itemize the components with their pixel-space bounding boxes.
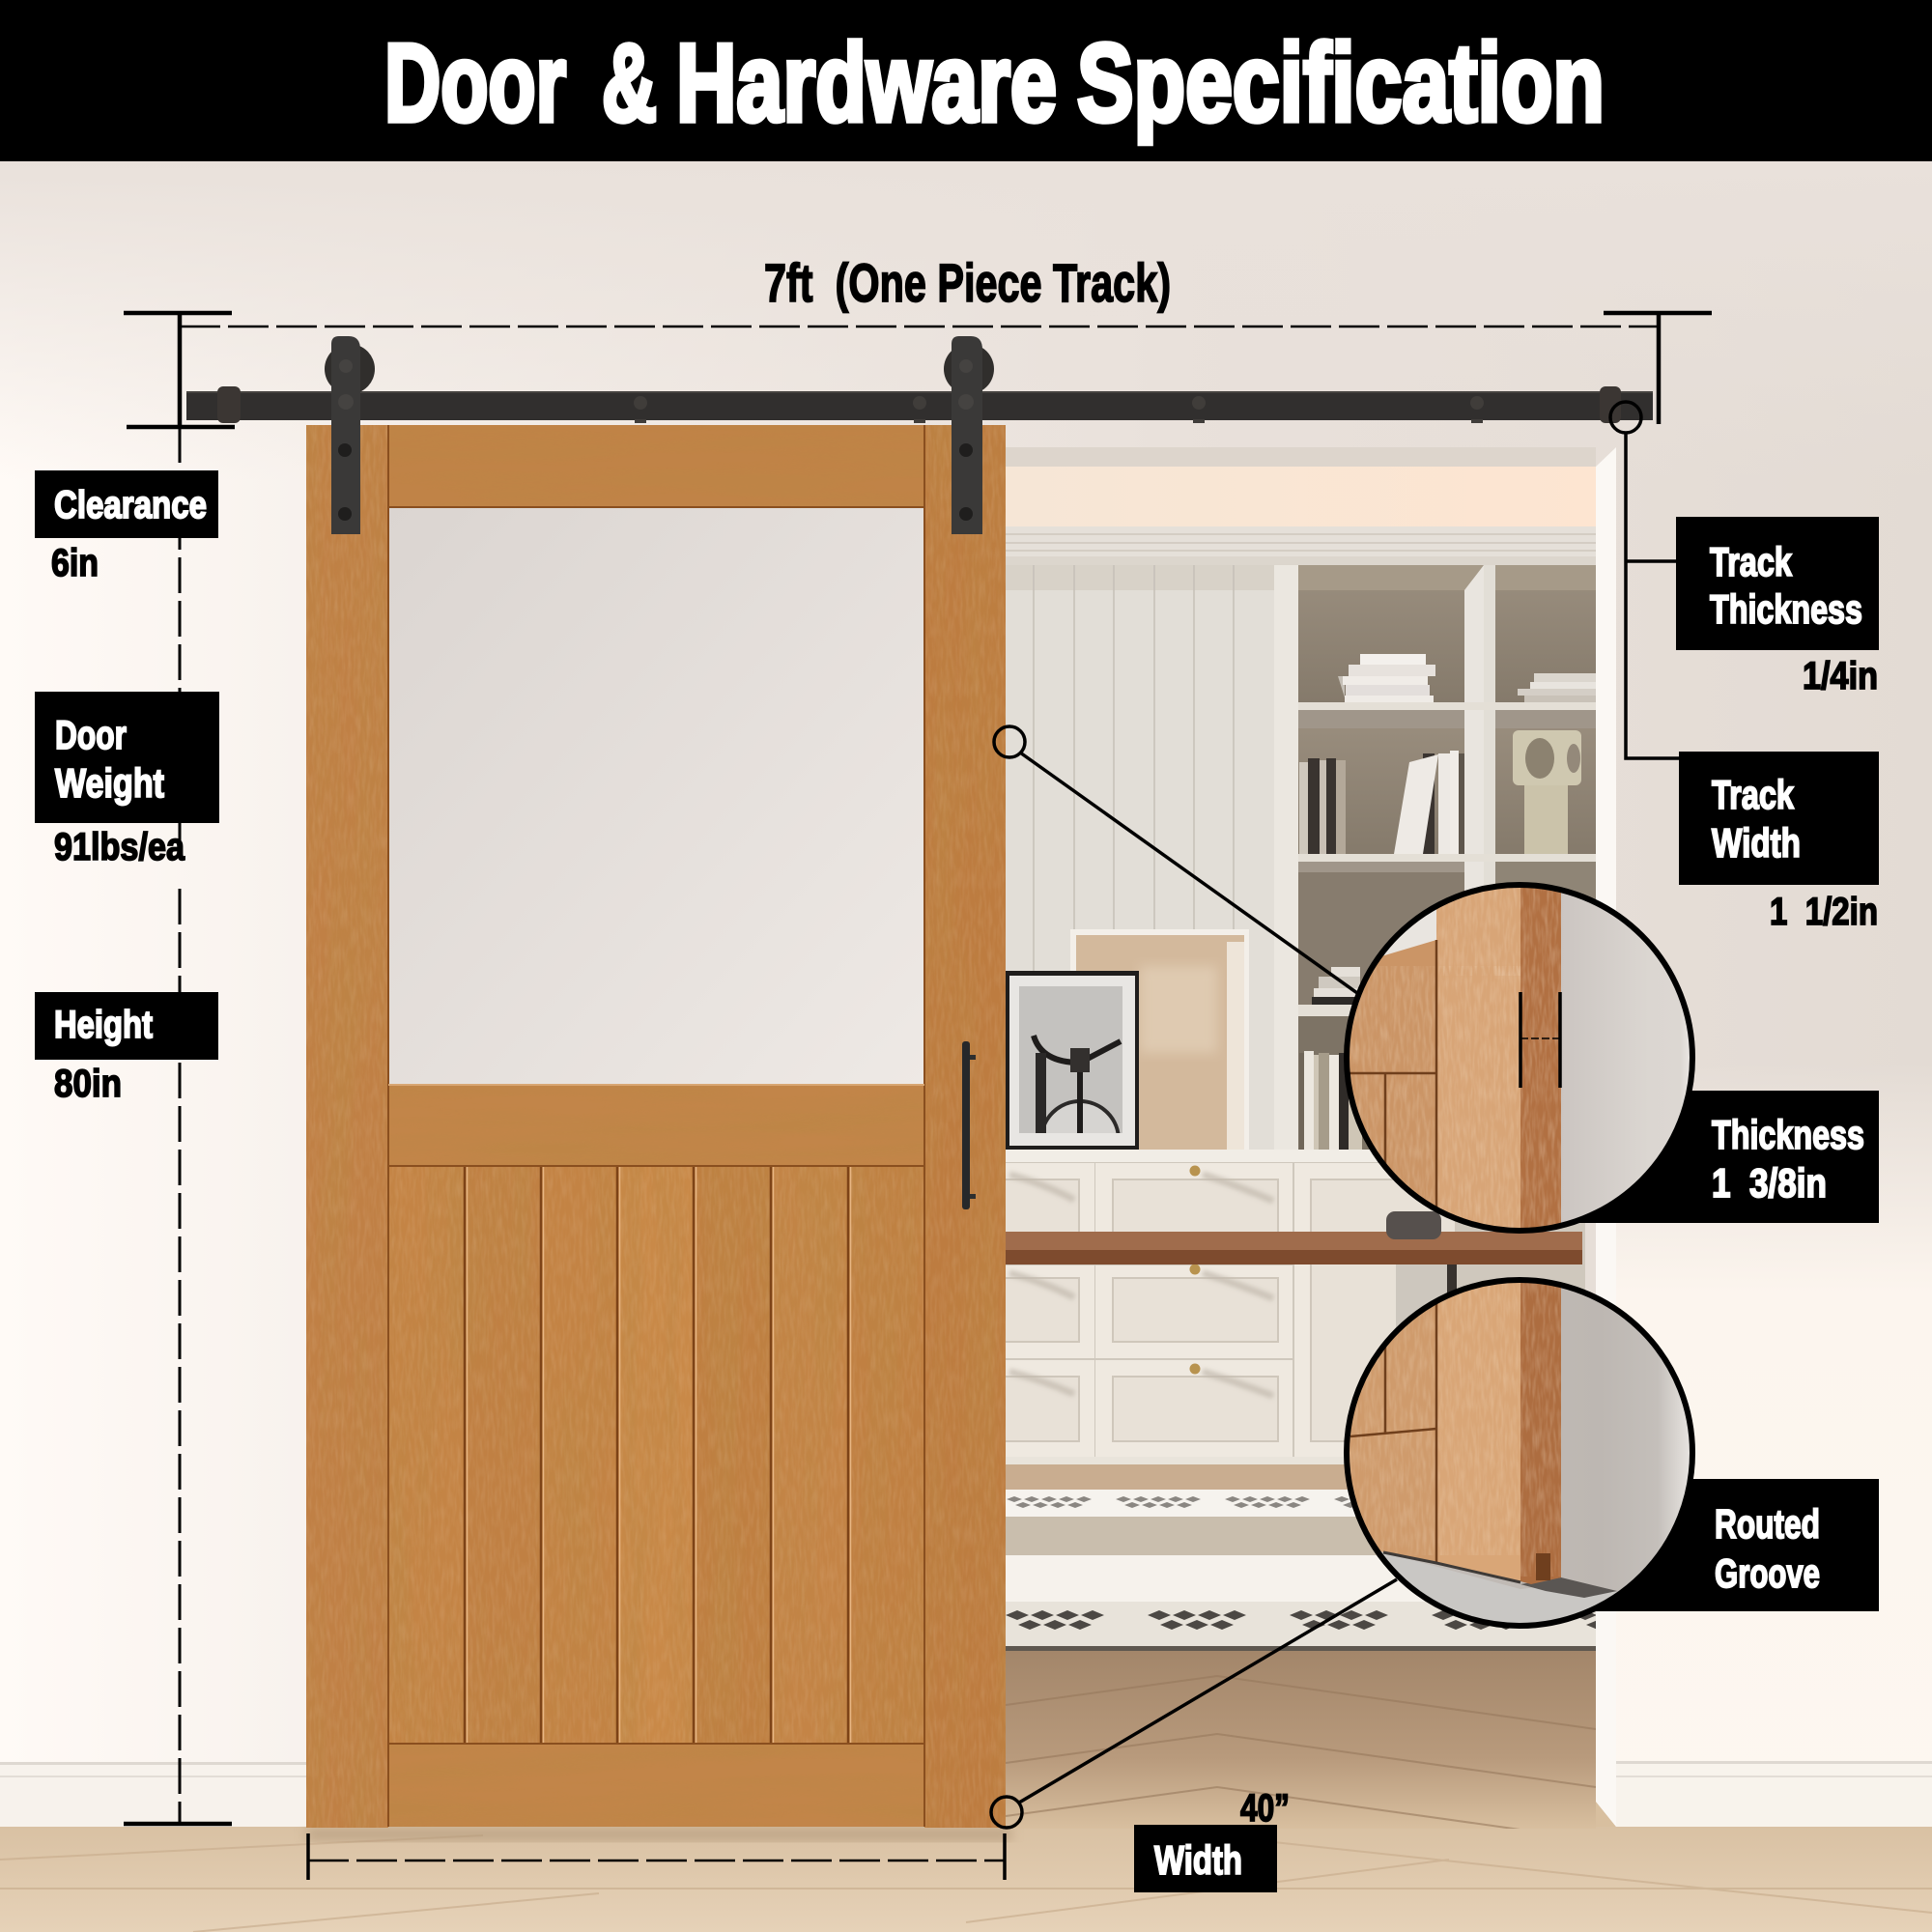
door: pull handle [962, 1041, 976, 1209]
books: upright [1299, 751, 1464, 854]
sliding barn door [306, 425, 1006, 1828]
sliding track [186, 386, 1653, 423]
door: frame stiles [306, 425, 1006, 1828]
track width label: Track [1712, 772, 1794, 817]
door weight label [35, 692, 219, 868]
track thickness label [1676, 517, 1879, 697]
room: soffit and lit cove [1006, 447, 1616, 565]
thickness callout box: 1 3/8in [1712, 1160, 1827, 1206]
thickness callout box: Thickness [1712, 1112, 1864, 1157]
track width label [1679, 752, 1879, 933]
door: top rail [388, 425, 924, 507]
bookcase: cell backs [1298, 565, 1596, 1151]
routed groove callout box: Groove [1715, 1550, 1820, 1596]
books: stacks [1338, 654, 1596, 702]
room: desk with cup [1006, 1211, 1582, 1293]
height label [35, 992, 218, 1105]
track thickness label: Thickness [1710, 586, 1862, 632]
track: bolts [634, 396, 1484, 423]
knob shadows [1009, 1175, 1273, 1396]
cabinet insets [995, 1179, 1456, 1441]
right roller hanger [944, 336, 994, 534]
door width label: 40” [1240, 1787, 1290, 1830]
track thickness label: 1/4in [1803, 655, 1878, 697]
height label: 80in [54, 1063, 122, 1105]
title bar: Hardware [676, 22, 1057, 145]
magnifier leader line: bottom [991, 1579, 1397, 1828]
room: cabinets [995, 1150, 1585, 1464]
room seen through the opening [995, 447, 1616, 1840]
routed groove callout box [1570, 1479, 1879, 1611]
doorway trim [1596, 447, 1616, 1827]
door width dimension line [308, 1833, 1005, 1880]
track length label: 7ft (One Piece Track) [764, 252, 1171, 313]
title bar [0, 0, 1932, 161]
room: black and white bicycle photo [1006, 971, 1139, 1150]
room: paneled wall [1006, 565, 1274, 971]
title bar: Specification [1077, 22, 1605, 145]
door weight label: Weight [55, 760, 164, 806]
title bar: & [602, 22, 657, 145]
room: floor and rug [1006, 1464, 1596, 1840]
track width label: 1 1/2in [1770, 891, 1878, 933]
room: bookcase [1274, 565, 1596, 1164]
magnifier leader line: top [994, 726, 1357, 993]
door: bottom rail [388, 1744, 924, 1827]
track callout leader lines [1610, 402, 1679, 758]
door width label [1134, 1787, 1290, 1892]
track thickness label: Track [1710, 539, 1792, 584]
track length dimension line [124, 313, 1712, 427]
track: right stop [1600, 386, 1621, 423]
thickness dimension mark [1520, 992, 1560, 1088]
cabinet fronts [1006, 1163, 1391, 1457]
clearance label: 6in [51, 542, 99, 584]
door width label: Width [1154, 1837, 1242, 1883]
title bar: Door [384, 22, 566, 145]
left roller hanger [325, 336, 375, 534]
baseboards [0, 1761, 1932, 1827]
wood floor [0, 1802, 1932, 1932]
routed groove callout box: Routed [1715, 1501, 1820, 1547]
clearance label: Clearance [54, 484, 207, 526]
sculpture [1513, 730, 1581, 854]
door height dimension line [124, 427, 232, 1824]
track: left stop [217, 386, 241, 423]
door weight label: Door [55, 712, 127, 757]
door: middle rail [388, 1085, 924, 1166]
door: vertical planks [388, 1166, 924, 1744]
books: lower shelves [1299, 967, 1362, 1150]
door weight label: 91lbs/ea [54, 826, 185, 868]
height label: Height [54, 1004, 153, 1046]
magnifier: routed groove detail [1343, 1275, 1700, 1633]
room: framed art [1070, 929, 1249, 1150]
track width label: Width [1712, 820, 1801, 866]
magnifier: door thickness detail [1343, 879, 1700, 1236]
clearance label [35, 470, 218, 584]
thickness callout box [1570, 1091, 1879, 1223]
door: frosted glass [388, 507, 924, 1085]
